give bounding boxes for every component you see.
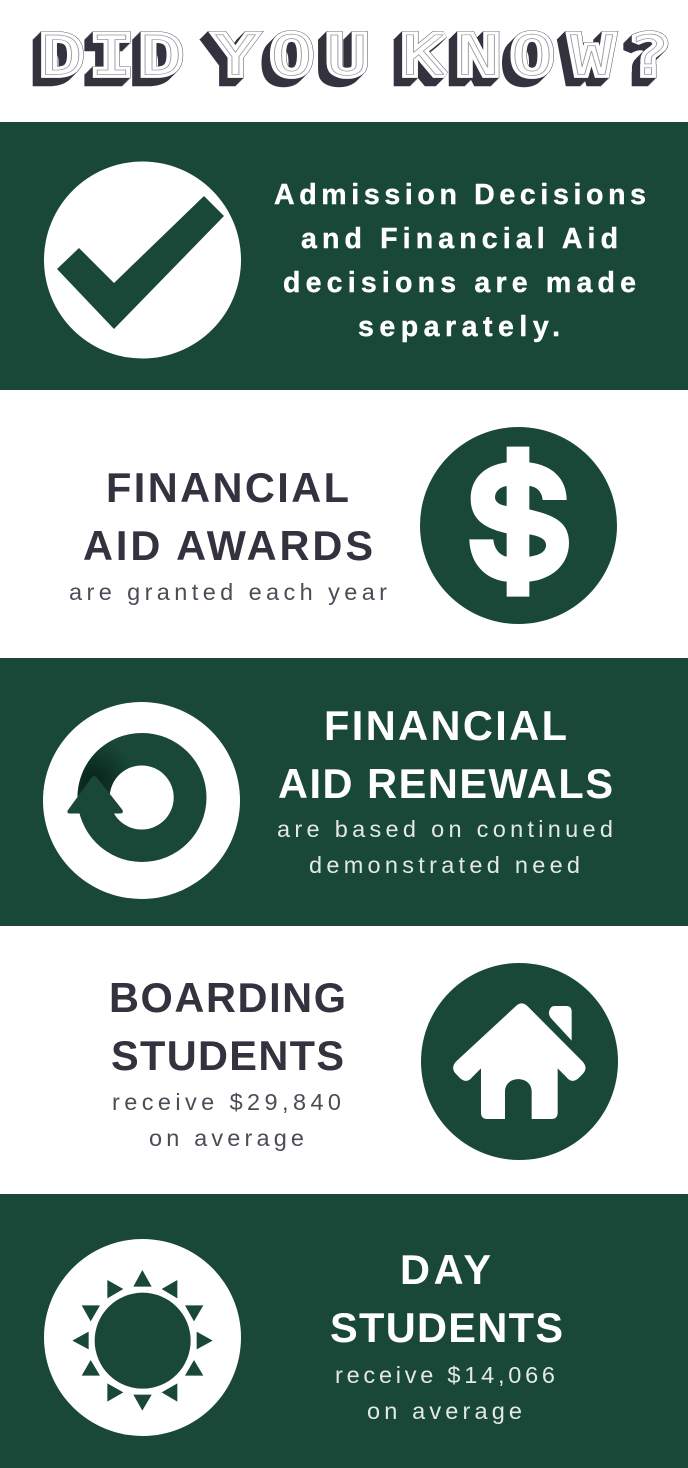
text: financial aid renewals: are based on continued (277, 816, 613, 842)
text: financial aid renewals (277, 702, 613, 878)
title: DID YOU KNOW?: DIDYOUKNOW? (41, 24, 670, 87)
text: admission decisions statement (274, 179, 646, 343)
text: admission decisions statement: Admission Decisions (274, 179, 646, 211)
icon: renewal arrow in circle (43, 702, 240, 899)
text: financial aid awards: AID AWARDS (83, 522, 373, 569)
text: boarding students: STUDENTS (111, 1032, 344, 1079)
text: financial aid awards (69, 464, 387, 605)
panel: admission decisions (0, 122, 688, 390)
text: financial aid awards: FINANCIAL (106, 464, 349, 511)
icon: check mark in circle (44, 162, 241, 358)
text: boarding students (109, 974, 346, 1151)
panel: financial aid awards (69, 427, 617, 624)
text: boarding students: on average (149, 1125, 304, 1151)
text: day students: receive $14,066 (335, 1362, 555, 1388)
icon: sun in circle (44, 1239, 241, 1436)
text: admission decisions statement: and Financial Aid (301, 223, 618, 255)
text: boarding students: BOARDING (109, 974, 346, 1021)
icon: house in circle (421, 963, 618, 1160)
text: day students: DAY (400, 1246, 491, 1293)
text: day students: STUDENTS (330, 1304, 563, 1351)
text: boarding students: receive $29,840 (112, 1089, 341, 1115)
text: financial aid awards: are granted each year (69, 579, 387, 605)
text: day students (330, 1246, 563, 1424)
text: day students: on average (367, 1398, 522, 1424)
title: DID YOU KNOW?: DIDYOUKNOW? (41, 24, 670, 87)
icon: dollar sign in circle (420, 427, 617, 624)
panel: day students (0, 1194, 688, 1468)
text: admission decisions statement: decisions are made (283, 267, 636, 299)
text: admission decisions statement: separately. (358, 311, 560, 343)
panel: boarding students (109, 963, 618, 1160)
panel: financial aid renewals (0, 658, 688, 926)
text: financial aid renewals: demonstrated need (309, 852, 580, 878)
text: financial aid renewals: AID RENEWALS (278, 760, 613, 807)
title: DID YOU KNOW?: DIDYOUKNOW? (41, 24, 670, 87)
text: financial aid renewals: FINANCIAL (324, 702, 567, 749)
